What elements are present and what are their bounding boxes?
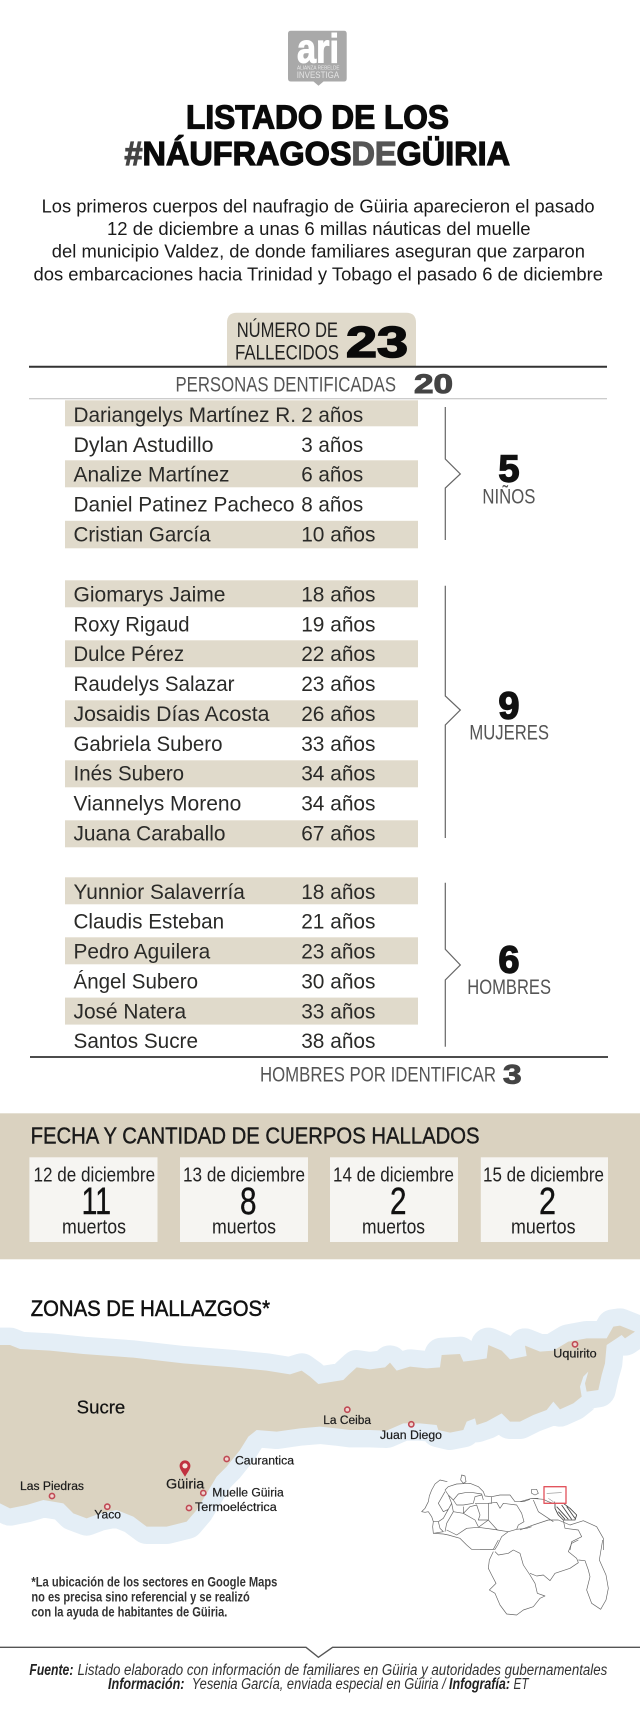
panel: women list: 26 años xyxy=(301,702,376,726)
card: 13 de diciembre: 8 xyxy=(240,1181,256,1223)
count: 5 niños: 5 xyxy=(498,449,520,491)
logo: ari investiga xyxy=(288,26,347,86)
panel: men list: Ángel Subero xyxy=(74,968,198,993)
locator box xyxy=(544,1487,566,1503)
sources and credits xyxy=(29,1662,608,1693)
sea halo xyxy=(0,1326,635,1527)
count: 5 niños: NIÑOS xyxy=(482,483,535,508)
card: 13 de diciembre: muertos xyxy=(212,1216,276,1238)
footnote: no es precisa sino referencial y se realizó xyxy=(31,1590,250,1605)
panel: children list: Cristian García xyxy=(74,522,211,546)
panel: children list: Analize Martínez xyxy=(74,463,230,487)
title xyxy=(124,98,510,172)
marker: Uquirito: Uquirito xyxy=(553,1349,597,1361)
card: 14 de diciembre: 2 xyxy=(390,1181,406,1223)
card: 12 de diciembre xyxy=(29,1157,158,1242)
panel: women list: 18 años xyxy=(301,582,376,606)
intro paragraph: Los primeros cuerpos del naufragio de Güiria aparecieron el pasado xyxy=(42,195,595,216)
marker: Yaco xyxy=(94,1504,121,1522)
panel: children list: 10 años xyxy=(301,522,376,546)
marker: Uquirito xyxy=(553,1342,597,1361)
panel: women list: 19 años xyxy=(301,612,376,636)
card: 14 de diciembre: muertos xyxy=(362,1216,425,1238)
panel: men list: 18 años xyxy=(301,880,376,904)
sources and credits: Infografía: xyxy=(449,1676,510,1693)
count: 6 hombres: HOMBRES xyxy=(467,975,551,999)
panel: men list: Yunnior Salaverría xyxy=(74,880,245,904)
bracket: men xyxy=(445,883,460,1047)
inset map: Venezuela xyxy=(422,1475,608,1615)
panel: men list: José Natera xyxy=(74,999,186,1023)
logo: ari investiga: ari xyxy=(297,26,339,72)
logo: ari investiga: ALIANZA REBELDE xyxy=(297,66,340,72)
logo: ari investiga: INVESTIGA xyxy=(297,70,339,80)
panel: women list: 34 años xyxy=(301,762,376,786)
marker: Yaco: Yaco xyxy=(94,1510,121,1522)
unidentified men count xyxy=(260,1059,522,1089)
marker: Juan Diego xyxy=(380,1422,442,1442)
panel: men list: 23 años xyxy=(301,939,376,963)
marker: Las Piedras xyxy=(20,1481,84,1499)
map: Paria peninsula xyxy=(0,1326,635,1527)
panel: women list: Juana Caraballo xyxy=(74,822,226,846)
map labels and markers xyxy=(20,1342,597,1522)
panel: men list: Claudis Esteban xyxy=(74,910,224,934)
panel: children list: Daniel Patinez Pacheco xyxy=(74,493,295,517)
title: #NÁUFRAGOSDEGÜIRIA xyxy=(124,135,510,172)
panel: children list xyxy=(65,400,418,548)
sources and credits: Yesenia García, enviada especial en Güiria / xyxy=(192,1676,447,1693)
land xyxy=(0,1326,635,1527)
panel: women list: Dulce Pérez xyxy=(74,642,184,666)
footnote xyxy=(31,1575,277,1620)
arrow divider xyxy=(0,1647,640,1657)
footnote: *La ubicación de los sectores en Google Maps xyxy=(31,1575,277,1590)
panel: women list: 67 años xyxy=(301,822,376,846)
panel: women list: Giomarys Jaime xyxy=(74,582,226,606)
panel: women list: Viannelys Moreno xyxy=(74,791,241,815)
marker: Las Piedras: Las Piedras xyxy=(20,1481,84,1493)
panel: children list: 6 años xyxy=(301,463,363,487)
panel: men list: Pedro Aguilera xyxy=(74,939,210,963)
unidentified men count: 3 xyxy=(503,1059,522,1089)
count: 6 hombres xyxy=(467,939,551,999)
panel: women list: 22 años xyxy=(301,642,376,666)
card: 15 de diciembre xyxy=(481,1157,608,1242)
panel: children list: 8 años xyxy=(301,493,363,517)
panel: dates and bodies found xyxy=(0,1113,640,1259)
panel: men list: 21 años xyxy=(301,910,376,934)
card: 15 de diciembre: 2 xyxy=(539,1181,556,1223)
marker: Caurantica: Caurantica xyxy=(235,1455,295,1467)
sources and credits: ET xyxy=(514,1676,530,1693)
panel: women list: 34 años xyxy=(301,791,376,815)
panel: women list: Roxy Rigaud xyxy=(74,612,190,636)
card: 14 de diciembre xyxy=(330,1157,458,1242)
panel: women list: 23 años xyxy=(301,672,376,696)
marker: La Ceiba xyxy=(323,1407,372,1427)
panel: women list: Inés Subero xyxy=(74,762,184,786)
bracket: women xyxy=(445,586,460,838)
panel: men list: Santos Sucre xyxy=(74,1029,198,1053)
card: 15 de diciembre: muertos xyxy=(511,1216,576,1238)
pin: Güiria: Güiria xyxy=(166,1476,205,1491)
count: 9 mujeres: MUJERES xyxy=(469,720,549,744)
marker: La Ceiba: La Ceiba xyxy=(323,1415,372,1427)
card: 15 de diciembre: 15 de diciembre xyxy=(483,1165,604,1187)
intro paragraph: dos embarcaciones hacia Trinidad y Tobago el pasado 6 de diciembre xyxy=(34,264,603,285)
total deaths badge: 23 xyxy=(346,318,408,367)
panel: women list: Josaidis Días Acosta xyxy=(74,702,270,726)
panel: women list xyxy=(65,580,418,847)
panel: women list: Raudelys Salazar xyxy=(74,672,234,696)
count: 9 mujeres xyxy=(469,685,549,744)
panel: children list: Dariangelys Martínez R. xyxy=(74,403,296,427)
sources and credits: Información: xyxy=(108,1676,184,1693)
total deaths badge: FALLECIDOS xyxy=(235,340,339,364)
intro paragraph: del municipio Valdez, de donde familiares aseguran que zarparon xyxy=(52,241,585,262)
panel: men list: 38 años xyxy=(301,1029,376,1053)
card: 14 de diciembre: 14 de diciembre xyxy=(333,1165,454,1187)
card: 12 de diciembre: 11 xyxy=(82,1181,111,1223)
card: 13 de diciembre: 13 de diciembre xyxy=(183,1165,305,1187)
bracket: children xyxy=(445,407,460,540)
marker: Juan Diego: Juan Diego xyxy=(380,1430,442,1442)
total deaths badge xyxy=(227,313,416,367)
map labels and markers: Sucre xyxy=(77,1397,125,1417)
panel: children list: 3 años xyxy=(301,433,363,457)
panel: women list: 33 años xyxy=(301,732,376,756)
identified persons count: PERSONAS DENTIFICADAS xyxy=(176,374,396,397)
total deaths badge: NÚMERO DE xyxy=(237,317,338,342)
pin: Güiria xyxy=(166,1460,205,1491)
intro paragraph xyxy=(34,195,603,285)
marker: Muelle Güiria: Muelle Güiria xyxy=(212,1488,284,1500)
count: 5 niños xyxy=(482,449,535,508)
identified persons count: 20 xyxy=(414,369,453,399)
panel: children list: Dylan Astudillo xyxy=(74,433,214,457)
card: 12 de diciembre: muertos xyxy=(62,1216,126,1238)
unidentified men count: HOMBRES POR IDENTIFICAR xyxy=(260,1064,496,1087)
intro paragraph: 12 de diciembre a unas 6 millas náuticas del muelle xyxy=(107,218,531,239)
sources and credits: Fuente: xyxy=(29,1662,73,1679)
heading: fecha y cantidad: FECHA Y CANTIDAD DE CUERPOS HALLADOS xyxy=(31,1122,480,1148)
footnote: con la ayuda de habitantes de Güiria. xyxy=(31,1605,227,1620)
panel: men list xyxy=(65,877,418,1053)
panel: women list: Gabriela Subero xyxy=(74,732,223,756)
heading: zonas de hallazgos: ZONAS DE HALLAZGOS* xyxy=(31,1296,270,1321)
panel: children list: 2 años xyxy=(301,403,363,427)
panel: men list: 30 años xyxy=(301,969,376,993)
panel: men list: 33 años xyxy=(301,999,376,1023)
count: 9 mujeres: 9 xyxy=(498,685,520,727)
count: 6 hombres: 6 xyxy=(498,939,520,981)
card: 13 de diciembre xyxy=(180,1157,308,1242)
marker: Termoeléctrica: Termoeléctrica xyxy=(195,1502,277,1514)
title: LISTADO DE LOS xyxy=(186,98,449,135)
card: 12 de diciembre: 12 de diciembre xyxy=(34,1165,155,1187)
